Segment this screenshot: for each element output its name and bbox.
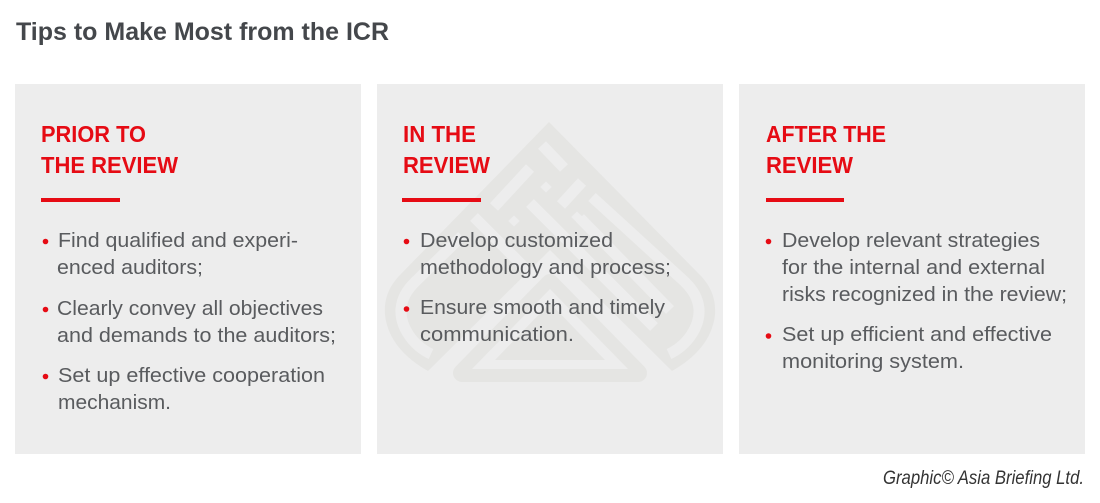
bullet list: risks recognized in the review; [782,283,1067,306]
heading rule [766,198,844,202]
bullet list: Ensure smooth and timely [420,296,666,319]
bullet list: and demands to the auditors; [57,324,336,347]
heading: after the review [766,121,886,178]
bullet list: Develop relevant strategies [782,229,1040,252]
bullet list [766,229,1067,373]
bullet list: monitoring system. [782,350,964,373]
bullet list [404,229,671,346]
bullet list: Set up efficient and effective [782,323,1052,346]
heading: prior to the review [41,121,178,178]
heading: prior to the review: THE REVIEW [41,152,178,178]
bullet list: communication. [420,323,574,346]
bullet list: enced auditors; [57,256,203,279]
panel: after the review [739,84,1085,454]
heading: in the review: REVIEW [403,152,490,178]
heading: after the review: AFTER THE [766,121,886,147]
heading: in the review [403,121,490,178]
heading: after the review: REVIEW [766,152,853,178]
heading: in the review: IN THE [403,121,476,147]
bullet list: for the internal and external [782,256,1045,279]
heading: prior to the review: PRIOR TO [41,121,146,147]
bullet list: mechanism. [58,391,171,414]
bullet list: Set up effective cooperation [58,364,325,387]
panel: in the review [377,84,723,454]
heading rule [41,198,120,202]
bullet list: methodology and process; [420,256,671,279]
watermark logo [385,122,715,373]
bullet list: Develop customized [420,229,613,252]
title: Tips to Make Most from the ICR [16,18,389,46]
bullet list: Clearly convey all objectives [57,297,323,320]
panel: prior to the review [15,84,361,454]
bullet list [43,229,336,414]
bullet list: Find qualified and experi- [58,229,298,252]
heading rule [402,198,481,202]
